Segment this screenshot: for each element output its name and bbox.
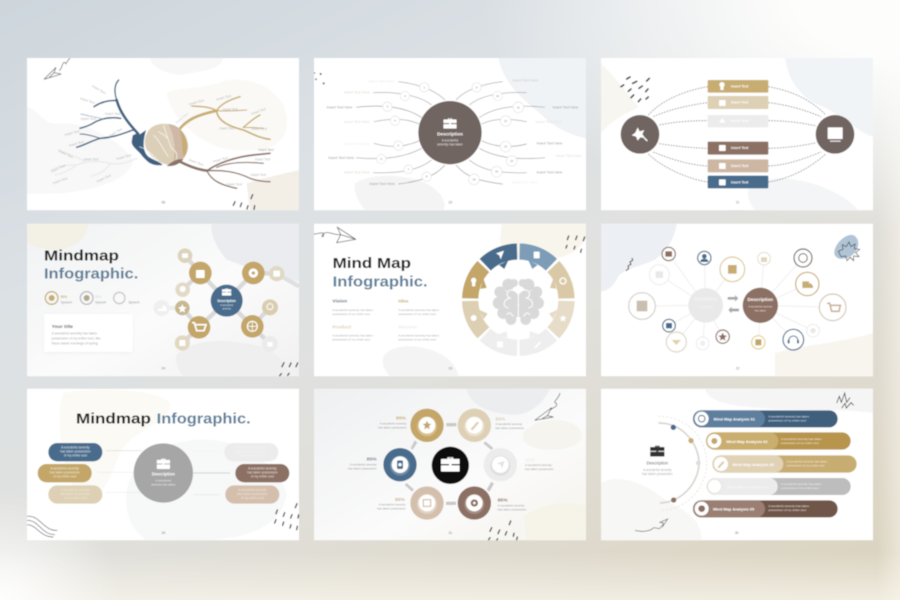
bar 2 — [708, 96, 768, 109]
label bottom right: has taken possession — [498, 507, 527, 511]
card: your title — [52, 324, 100, 346]
slide 2: radial spider diagram — [314, 58, 586, 210]
ring tan — [458, 409, 491, 442]
brown hub — [743, 288, 778, 323]
grey hub: Description — [694, 297, 718, 302]
node numbers: 8 — [426, 175, 428, 179]
ring grey — [484, 448, 517, 481]
title: Mindmap — [76, 412, 151, 428]
node numbers — [381, 85, 520, 181]
grey hub: A wonderful — [699, 305, 713, 309]
faint branch labels: Insert Text — [227, 183, 242, 187]
bar 5 — [708, 159, 768, 172]
label bottom left: has taken possession — [377, 507, 406, 511]
bar gold: A wonderful serenity has taken — [781, 437, 822, 441]
bar tan — [712, 455, 857, 473]
ring labels: 50% — [95, 295, 102, 299]
brain — [132, 124, 188, 166]
text block: mission — [398, 325, 439, 342]
connectors — [356, 82, 545, 184]
card: your title: Your title — [52, 324, 73, 330]
description: Description — [647, 461, 669, 466]
small arrows — [405, 423, 494, 505]
title: Infographic. — [44, 267, 138, 283]
faint branch labels: Insert Text — [189, 98, 204, 106]
icon: paper plane — [314, 227, 356, 243]
bar blue — [693, 410, 838, 427]
page number: 30 — [735, 531, 739, 535]
insert text labels: Insert Text Here — [537, 141, 562, 145]
card: your title: possession of my entire soul, like — [52, 337, 101, 341]
bar 4: Insert Text — [731, 146, 749, 150]
faint branch labels: Insert Text — [83, 158, 99, 162]
icon: scribble — [837, 393, 854, 408]
dashed connectors — [648, 87, 826, 182]
icon: paper plane — [635, 519, 668, 531]
page number: 34 — [161, 531, 165, 535]
timeline dots — [671, 425, 701, 503]
page number: 21 — [736, 201, 740, 205]
faint branch labels: Insert Text — [258, 148, 274, 152]
arrow lines — [97, 451, 230, 495]
icon: paper plane — [535, 393, 560, 420]
description circle: serenity has taken — [151, 483, 176, 487]
node numbers: 2 — [404, 94, 406, 98]
pill blue: A wonderful serenity — [61, 446, 90, 450]
pill blush — [225, 485, 279, 504]
central description circle — [418, 101, 482, 164]
satellite nodes — [629, 247, 846, 352]
text block: idea: Idea — [398, 299, 409, 305]
title — [333, 256, 428, 290]
faint branch labels: Insert Text — [175, 112, 189, 125]
label bottom left: 85% — [395, 497, 406, 503]
bar blue: possession of my entire soul — [768, 419, 806, 423]
faint branch labels: Insert Text — [251, 107, 266, 116]
label bottom right: 85% — [498, 498, 508, 504]
title: Mind Map — [333, 256, 411, 272]
pill grey — [224, 443, 278, 461]
node numbers: 1 — [424, 85, 426, 89]
brown branch — [180, 153, 270, 188]
node numbers: 7 — [408, 167, 410, 171]
bar blue: A wonderful serenity has taken — [768, 415, 809, 419]
wheel segments — [451, 243, 586, 367]
label bottom right: A wonderful serenity — [498, 503, 525, 507]
ring labels: 50% — [61, 295, 67, 299]
ring labels: Speech — [95, 300, 106, 304]
insert text labels: Insert Text Here — [537, 171, 562, 175]
faint branch labels: Insert Text — [105, 112, 120, 116]
decorative dashes — [280, 363, 298, 376]
page number: 23 — [448, 367, 452, 371]
label top right: has taken possession — [495, 426, 524, 430]
decorative waves — [27, 516, 57, 537]
page number: 24 — [161, 367, 165, 371]
central description circle: Description — [437, 132, 463, 137]
ring labels: Speech — [61, 300, 72, 304]
spokes — [642, 254, 833, 343]
bar 1: Insert Text — [731, 84, 749, 88]
pill grey: A wonderful serenity — [237, 446, 266, 450]
pill gold: has taken possession — [49, 471, 80, 475]
faint branch labels: Insert Text — [255, 157, 270, 161]
text block: vision: Vision — [332, 299, 347, 305]
bar 4 — [708, 142, 768, 155]
slide 4: hub and spoke with title — [27, 224, 299, 376]
bar brown: A wonderful serenity has taken — [768, 504, 809, 508]
bar 5: Insert Text — [731, 164, 749, 168]
bar 3: Insert Text — [731, 119, 749, 123]
faint branch labels: Insert Text — [213, 156, 228, 164]
bar 6: Insert Text — [731, 180, 749, 184]
node numbers: 13 — [504, 145, 508, 149]
pill grey: has taken possession — [236, 450, 267, 454]
connectors — [170, 260, 300, 340]
pill brown: of my entire soul — [251, 475, 274, 479]
faint branch labels — [50, 84, 274, 187]
light grey branch — [52, 155, 137, 176]
central description circle: serenity has taken — [437, 143, 463, 147]
centre node: A wonderful — [220, 304, 234, 307]
bar tan: A wonderful serenity has taken — [787, 460, 828, 464]
pill blush: has taken possession — [237, 492, 268, 496]
node numbers: 4 — [394, 119, 396, 123]
card: your title: A wonderful serenity has taken — [52, 332, 97, 336]
bar brown: possession of my entire soul — [768, 508, 806, 512]
ring blush — [410, 486, 444, 520]
progress rings — [45, 292, 125, 304]
pill gold — [38, 464, 92, 482]
pill brown: has taken possession — [247, 471, 278, 475]
label top left: has taken possession — [378, 425, 407, 429]
label left: has taken possession — [348, 466, 377, 470]
node numbers: 12 — [504, 119, 508, 123]
insert text labels: Insert Text Here — [369, 182, 395, 186]
ring gold — [410, 409, 444, 442]
bar gold: Mind Map Analysis 02 — [726, 439, 768, 444]
faint branch labels: Insert Text — [108, 127, 123, 138]
decorative dashes — [275, 504, 299, 530]
centre briefcase — [432, 447, 469, 484]
pill gold: of my entire soul — [53, 475, 77, 479]
blue branch — [77, 80, 138, 147]
node numbers: 11 — [517, 105, 520, 109]
faint branch labels: Insert Text — [96, 173, 112, 184]
bar grey — [707, 478, 851, 495]
decorative dashes — [621, 77, 649, 102]
pill blue: of my entire soul — [64, 454, 87, 458]
bar 6 — [708, 176, 768, 188]
description circle: A wonderful — [156, 479, 171, 483]
brown hub: has taken — [755, 308, 767, 312]
outer nodes — [154, 248, 284, 352]
slide 3: two hubs with bars — [601, 58, 873, 210]
label left: 85% — [367, 457, 377, 463]
label top left — [378, 416, 407, 429]
title — [44, 248, 138, 283]
pill tan: of my entire soul — [64, 496, 87, 500]
faint branch labels: Insert Text — [188, 158, 204, 167]
faint branch labels: Insert Text — [81, 117, 96, 121]
faint branch labels: Insert Text — [80, 96, 96, 105]
arrows — [728, 295, 739, 313]
faint branch labels: Insert Text — [69, 140, 84, 148]
label bottom left — [377, 497, 406, 511]
description circle — [134, 443, 193, 503]
centre node: Description — [218, 299, 236, 303]
insert text labels: Insert Text Here — [536, 120, 561, 124]
wheel icons — [471, 251, 567, 348]
text block: vision: A wonderful serenity has taken — [332, 308, 373, 312]
text block: product — [332, 325, 373, 342]
decorative dashes — [489, 521, 517, 540]
pill brown — [235, 464, 289, 482]
centre node — [211, 285, 243, 317]
label top right — [495, 416, 524, 430]
pill gold: A wonderful serenity — [50, 467, 79, 471]
slide 5: brain wheel — [314, 224, 586, 376]
pill blue — [48, 443, 102, 461]
label bottom right — [498, 498, 527, 511]
label right: A wonderful serenity — [525, 463, 552, 467]
page number: 20 — [448, 201, 452, 205]
bar grey: Mind Map Analysis 04 — [727, 484, 769, 489]
central description circle: A wonderful — [442, 138, 459, 142]
node numbers: 9 — [476, 85, 478, 89]
pill blush: A wonderful serenity — [238, 488, 267, 492]
slide 8: process ring — [314, 389, 586, 540]
text block: product: Product — [332, 325, 352, 331]
insert text labels: Insert Text Here — [512, 181, 537, 185]
node numbers: 5 — [398, 144, 400, 148]
faint branch labels: Insert Text — [116, 153, 132, 161]
label top left: A wonderful serenity — [380, 421, 407, 425]
title: Infographic. — [157, 412, 251, 428]
insert text labels: Insert Text Here — [556, 154, 582, 158]
card: your title: these sweet mornings of spring. — [52, 342, 99, 346]
label left: A wonderful serenity — [350, 462, 377, 466]
label top right: 85% — [495, 416, 506, 422]
text block: idea — [398, 299, 439, 316]
bar gold — [706, 432, 851, 450]
page number: 56 — [161, 201, 165, 205]
ring labels — [61, 295, 140, 304]
nodes — [377, 83, 524, 185]
label bottom left: A wonderful serenity — [379, 503, 406, 507]
bar grey: possession of my entire soul — [781, 486, 819, 490]
page number: 31 — [448, 531, 452, 535]
faint branch labels: Insert Text — [91, 84, 106, 95]
label top right: A wonderful serenity — [495, 422, 523, 426]
node numbers: 3 — [387, 105, 389, 109]
insert text labels: Insert Text Here — [553, 106, 578, 110]
faint branch labels: Insert Text — [223, 108, 238, 112]
label top left: 85% — [396, 416, 407, 422]
description circle: Description — [152, 472, 175, 477]
node numbers: 15 — [495, 170, 499, 174]
node numbers: 6 — [381, 157, 383, 161]
insert text labels — [327, 79, 582, 186]
pill tan: has taken possession — [60, 492, 91, 496]
curved timeline — [658, 416, 707, 510]
centre node: serenity — [222, 307, 232, 310]
pill brown: A wonderful serenity — [248, 467, 277, 471]
description: has taken possession — [642, 472, 673, 476]
satellite icons — [637, 251, 840, 346]
faint branch labels: Insert Text — [52, 176, 68, 185]
faint branch labels: Insert Text — [219, 126, 235, 130]
slide 7: pills around description — [27, 389, 299, 540]
pill grey: of my entire soul — [240, 454, 263, 458]
left hub — [621, 115, 659, 154]
title — [76, 412, 251, 428]
starburst — [834, 235, 860, 261]
node numbers: 16 — [473, 177, 476, 181]
decorative dashes — [233, 195, 255, 209]
bar 2: Insert Text — [731, 100, 749, 104]
bar grey: A wonderful serenity has taken — [781, 482, 822, 486]
pill tan: A wonderful serenity — [61, 488, 90, 492]
squiggle — [626, 258, 633, 271]
insert text labels: Insert Text Here — [328, 156, 354, 160]
faint branch labels: Insert Text — [64, 129, 80, 137]
ring labels: Speech — [128, 300, 140, 304]
gold nodes — [188, 262, 265, 339]
pill blue: has taken possession — [60, 450, 91, 454]
text block: product: possession of my entire soul — [332, 338, 370, 342]
pill blush: of my entire soul — [241, 496, 264, 500]
page number: 22 — [736, 367, 740, 371]
bar tan: Mind Map Analysis 03 — [733, 462, 775, 467]
slide 1: brain tree mind map — [27, 58, 299, 210]
bar tan: possession of my entire soul — [787, 464, 825, 468]
text block: vision — [332, 299, 373, 316]
ring brown — [458, 486, 491, 520]
text block: mission: A wonderful serenity has taken — [398, 334, 439, 338]
insert text labels: Insert Text Here — [344, 171, 370, 175]
faint branch labels: Insert Text — [251, 173, 266, 177]
text block: mission: possession of my entire soul — [398, 338, 436, 342]
label right: 85% — [525, 457, 536, 463]
text block: idea: A wonderful serenity has taken — [398, 308, 439, 312]
faint branch labels: Insert Text — [252, 127, 267, 131]
bar brown — [693, 500, 838, 517]
bar gold: possession of my entire soul — [781, 441, 819, 445]
bar 3 — [708, 115, 768, 127]
text block: idea: possession of my entire soul — [398, 312, 436, 316]
title: Infographic. — [333, 274, 428, 290]
insert text labels: Insert Text Here — [512, 79, 538, 83]
bar brown: Mind Map Analysis 05 — [713, 507, 755, 512]
decorative dots — [314, 72, 325, 84]
text block: product: A wonderful serenity has taken — [332, 334, 373, 338]
node numbers: 10 — [496, 94, 500, 98]
label left — [348, 457, 377, 470]
insert text labels: Insert Text Here — [344, 142, 370, 146]
insert text labels: Insert Text Here — [368, 79, 394, 83]
title: Mindmap — [44, 248, 119, 264]
pill tan — [48, 485, 102, 504]
grey hub — [688, 288, 723, 323]
brown hub: A wonderful serenity — [748, 304, 773, 308]
label right: has taken possession — [525, 467, 554, 471]
bar blue: Mind Map Analysis 01 — [714, 417, 756, 422]
insert text labels: Insert Text Here — [344, 120, 370, 124]
brown hub: Description — [748, 297, 773, 302]
ring blue — [383, 448, 417, 481]
right hub — [816, 115, 854, 154]
description: A wonderful serenity — [643, 468, 672, 472]
slide 6: twin hub network — [601, 224, 873, 376]
brain — [493, 277, 544, 325]
decorative dashes — [566, 236, 585, 252]
text block: vision: possession of my entire soul — [332, 312, 370, 316]
faint branch labels: Insert Text — [50, 163, 66, 174]
insert text labels: Insert Text Here — [344, 91, 370, 95]
faint branch labels: Insert Text — [216, 94, 232, 102]
slide 9: analysis bars — [601, 389, 873, 540]
icon: paper plane — [44, 58, 70, 79]
slide collection — [26, 58, 874, 541]
gold branch — [179, 97, 270, 139]
label right — [525, 457, 554, 471]
faint branch labels: Insert Text — [58, 149, 74, 159]
node numbers: 14 — [510, 159, 514, 163]
text block: mission: Mission — [398, 325, 417, 331]
description — [642, 446, 673, 476]
bar 1 — [708, 80, 768, 93]
insert text labels: Insert Text Here — [327, 106, 352, 110]
